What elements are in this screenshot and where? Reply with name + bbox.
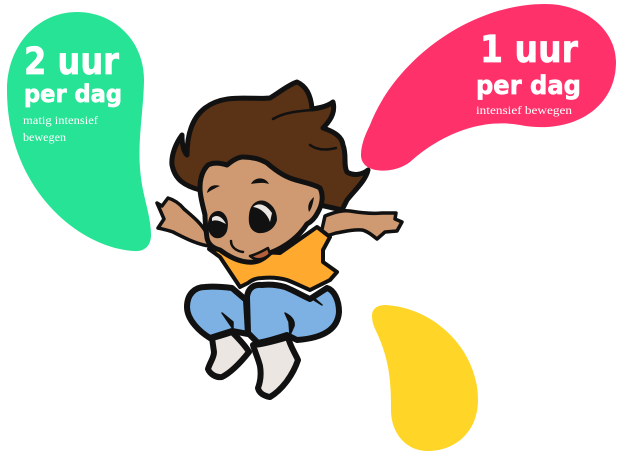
panel: pink drop, 1 uur <box>361 4 616 171</box>
nose mark <box>231 241 243 252</box>
subheading: per dag: per dag <box>476 71 581 101</box>
eye: right <box>249 201 277 233</box>
socks <box>208 332 298 397</box>
ear <box>308 197 314 212</box>
text: matig intensief bewegen <box>23 113 98 144</box>
hair back <box>172 82 368 210</box>
shirt <box>209 227 337 290</box>
panel: green drop, 2 uur <box>7 12 151 251</box>
illustration: jumping child <box>157 82 402 397</box>
right arm <box>320 211 402 239</box>
eye: left <box>208 211 228 238</box>
text: matig intensief bewegen: bewegen <box>23 130 66 144</box>
mouth <box>250 248 270 259</box>
subheading: per dag: per dag <box>24 80 122 108</box>
face <box>200 157 322 262</box>
jeans <box>187 285 339 343</box>
text: matig intensief bewegen: matig intensief <box>23 113 98 127</box>
text: intensief bewegen: intensief bewegen <box>476 103 572 117</box>
eyebrows <box>207 178 269 193</box>
left arm <box>157 198 210 246</box>
heading: 2 uur: 2 uur <box>24 40 120 83</box>
heading: 1 uur: 1 uur <box>480 28 579 71</box>
jeans creases <box>222 297 322 335</box>
panel: yellow drop <box>372 305 478 451</box>
hair strands <box>273 110 336 150</box>
